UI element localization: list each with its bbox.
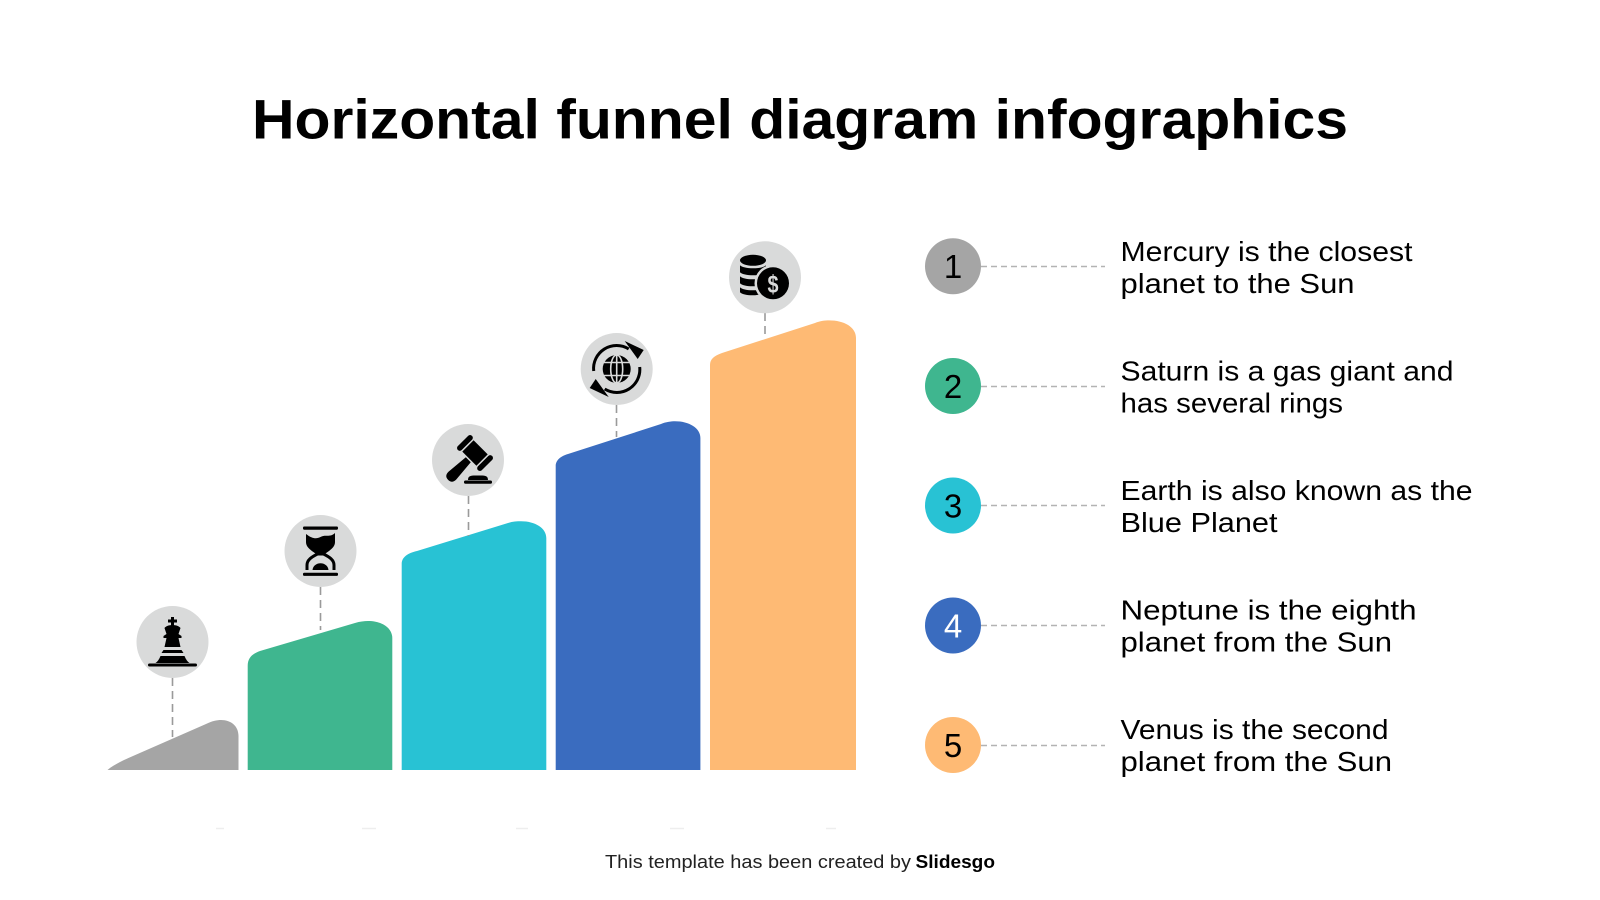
list item 5: Venus is the second [1120,714,1388,745]
list item 3: Earth is also known as the [1120,475,1472,506]
title: Horizontal funnel diagram infographics [252,88,1348,150]
list item 1: planet to the Sun [1120,268,1354,299]
icon: gavel [432,424,504,496]
icon: coins with dollar [729,241,801,313]
list item 2: has several rings [1120,388,1343,418]
icon connectors [172,313,765,737]
funnel chart [108,320,856,770]
list item 4 [925,594,1416,658]
icon: chess king [136,606,208,678]
bar 3: teal [402,521,546,770]
bar 5: orange [710,320,856,770]
icon: globe with arrows [581,333,653,405]
list item 4: Neptune is the eighth [1120,594,1416,626]
list item 2 [925,356,1454,418]
list item 3: Blue Planet [1120,507,1278,538]
list item 2: Saturn is a gas giant and [1120,356,1454,386]
list item 1 [925,236,1413,299]
bar 1: gray [108,720,238,770]
bar 2: green [248,621,392,770]
list item 5 [925,714,1392,777]
list item 1: Mercury is the closest [1120,236,1413,267]
list item 4: planet from the Sun [1120,626,1392,658]
list item 4: 4 [944,608,962,644]
bar 4: blue [556,421,700,770]
list item 1: 1 [944,248,962,285]
icon: hourglass [284,515,356,587]
icon: coins with dollar: $ [768,270,779,298]
list item 5: planet from the Sun [1120,746,1392,777]
faint marks under chart [216,828,836,830]
footer credit: Slidesgo [916,851,995,872]
list item 3 [925,475,1472,538]
list item 5: 5 [944,727,962,764]
list item 3: 3 [944,488,962,524]
list item 2: 2 [944,368,962,405]
footer credit: This template has been created by [605,851,912,872]
